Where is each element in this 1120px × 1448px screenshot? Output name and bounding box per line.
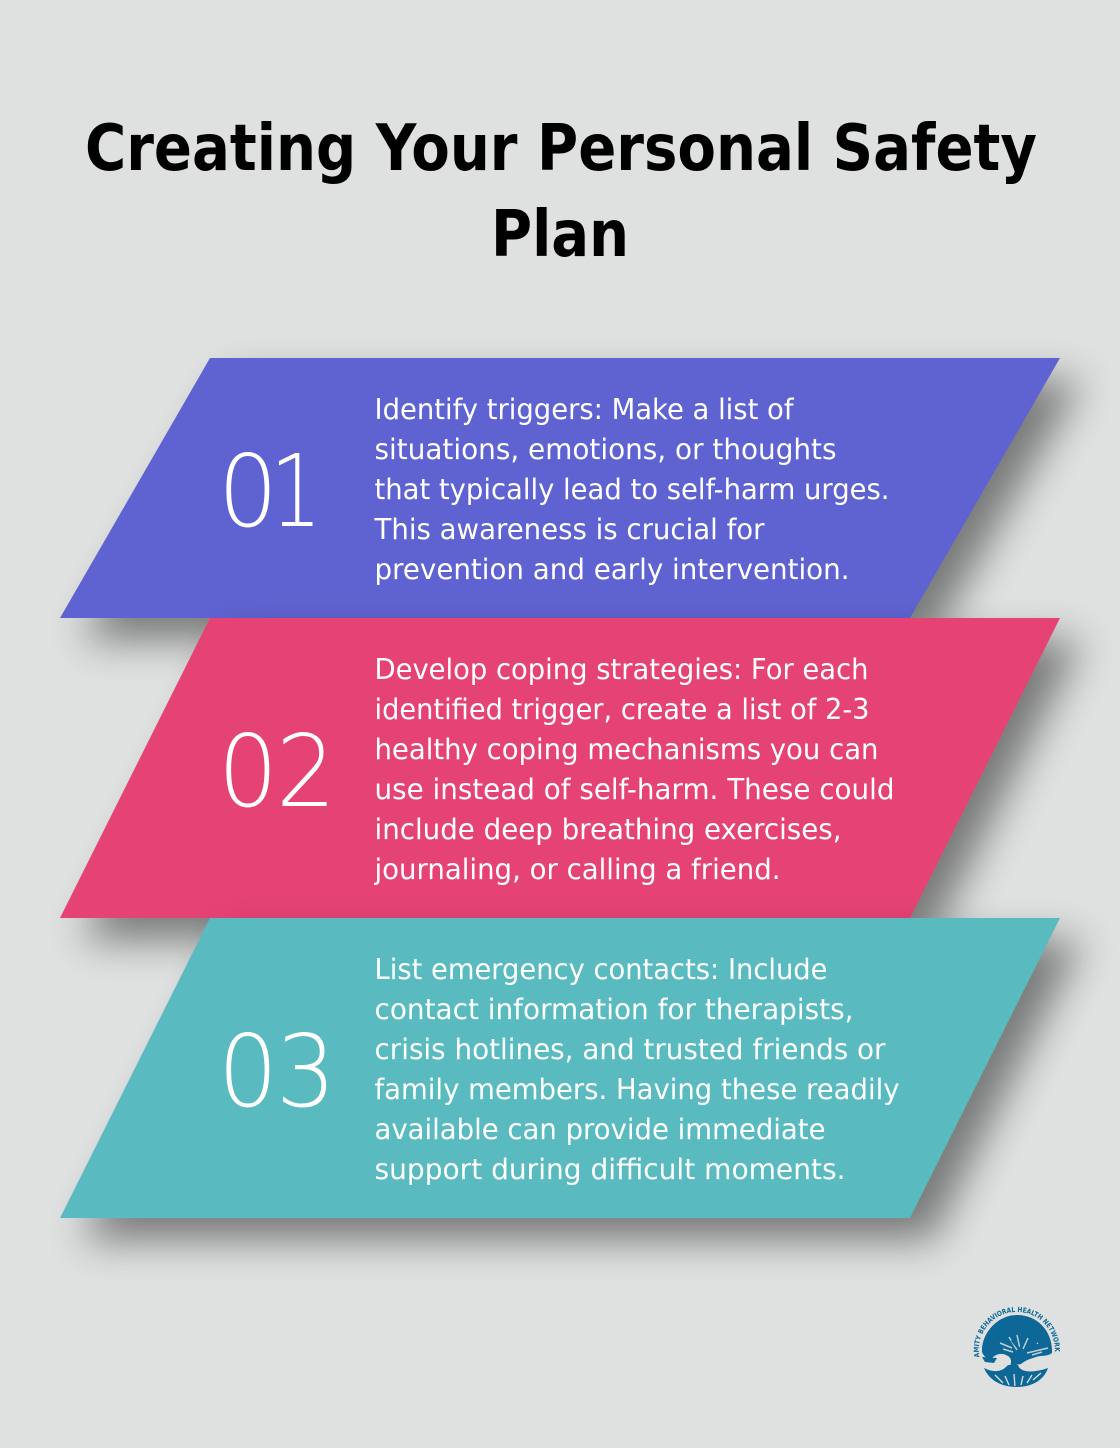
step 1 text: that typically lead to self-harm urges. (374, 473, 890, 506)
icon: Amity Behavioral Health Network logo (974, 1306, 1060, 1387)
step 1 text: situations, emotions, or thoughts (374, 433, 836, 466)
step 3 text (374, 953, 900, 1186)
step 1 text (374, 393, 890, 586)
band shape (60, 358, 1060, 618)
number 01: 1 (270, 433, 322, 550)
step 1 text: This awareness is crucial for (374, 513, 765, 546)
step 3 text: family members. Having these readily (374, 1073, 900, 1106)
number 02: 0 (218, 713, 278, 830)
icon: Amity Behavioral Health Network logo: AMITY BEHAVIORAL HEALTH NETWORK (974, 1306, 1060, 1358)
panel: step 1 identify triggers (60, 358, 1082, 640)
number 03: 0 (218, 1013, 278, 1130)
number 03: 3 (276, 1013, 336, 1130)
step 1 text: prevention and early intervention. (374, 553, 850, 586)
step 3 text: crisis hotlines, and trusted friends or (374, 1033, 886, 1066)
band shape (60, 918, 1060, 1218)
step 2 text: include deep breathing exercises, (374, 813, 842, 846)
number 02: 2 (276, 713, 336, 830)
number 01: 0 (218, 433, 278, 550)
panel: step 3 emergency contacts (60, 918, 1082, 1240)
number 01 (218, 433, 322, 550)
number 03 (218, 1013, 336, 1130)
title: Plan (491, 198, 629, 272)
step 3 text: contact information for therapists, (374, 993, 854, 1026)
step 2 text (374, 653, 895, 886)
step 3 text: available can provide immediate (374, 1113, 826, 1146)
number 02 (218, 713, 336, 830)
panel: step 2 coping strategies (60, 618, 1082, 940)
band shape (60, 618, 1060, 918)
step 3 text: List emergency contacts: Include (374, 953, 828, 986)
step 2 text: healthy coping mechanisms you can (374, 733, 878, 766)
title (85, 112, 1037, 272)
step 2 text: identified trigger, create a list of 2-3 (374, 693, 870, 726)
step 2 text: Develop coping strategies: For each (374, 653, 868, 686)
step 2 text: journaling, or calling a friend. (374, 853, 780, 886)
step 2 text: use instead of self-harm. These could (374, 773, 894, 806)
step 3 text: support during difficult moments. (374, 1153, 846, 1186)
step 1 text: Identify triggers: Make a list of (374, 393, 794, 426)
